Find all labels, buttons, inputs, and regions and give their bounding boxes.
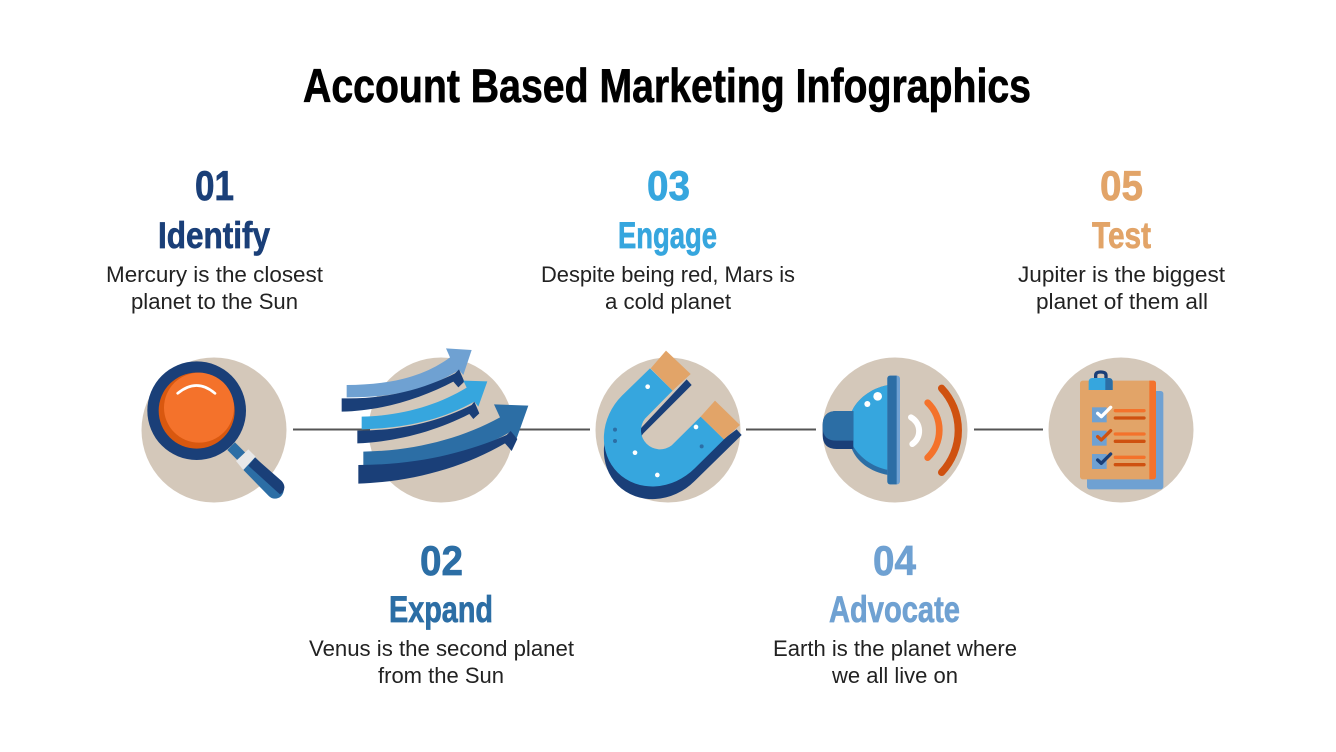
step 02 text: Expand [389, 589, 493, 630]
step 02 text: from the Sun [378, 663, 504, 688]
step 03 text [541, 162, 795, 314]
step 03 text: a cold planet [605, 289, 731, 314]
connector lines [293, 428, 1043, 430]
title: Account Based Marketing Infographics [303, 59, 1031, 112]
step 02 text: 02 [420, 537, 463, 584]
icon: checklist clipboard [1080, 372, 1163, 489]
step 01 text: Mercury is the closest [106, 262, 323, 287]
step 05 text [1018, 162, 1225, 314]
icon: three rising arrows [342, 348, 528, 484]
step 01 text: planet to the Sun [131, 289, 298, 314]
step 04 text: Advocate [829, 589, 960, 630]
step 03 text: 03 [647, 162, 690, 209]
step 05 text: Jupiter is the biggest [1018, 262, 1225, 287]
step 01 text [106, 162, 323, 314]
step 03 text: Engage [618, 215, 717, 256]
step 05 text: planet of them all [1036, 289, 1208, 314]
step 03 text: Despite being red, Mars is [541, 262, 795, 287]
step 02 text: Venus is the second planet [309, 636, 574, 661]
step 01 text: 01 [195, 162, 234, 209]
step 05 text: Test [1092, 215, 1151, 256]
icon: magnifying glass [147, 361, 284, 494]
background circles [142, 358, 1194, 502]
step 04 text: Earth is the planet where [773, 636, 1017, 661]
step 04 text: 04 [873, 537, 917, 584]
step 05 text: 05 [1100, 162, 1143, 209]
step 04 text [773, 537, 1017, 688]
step 01 text: Identify [158, 215, 270, 256]
step 04 text: we all live on [831, 663, 958, 688]
step 02 text [309, 537, 574, 688]
icon: magnet [604, 351, 742, 499]
icon: loudspeaker [823, 376, 958, 484]
